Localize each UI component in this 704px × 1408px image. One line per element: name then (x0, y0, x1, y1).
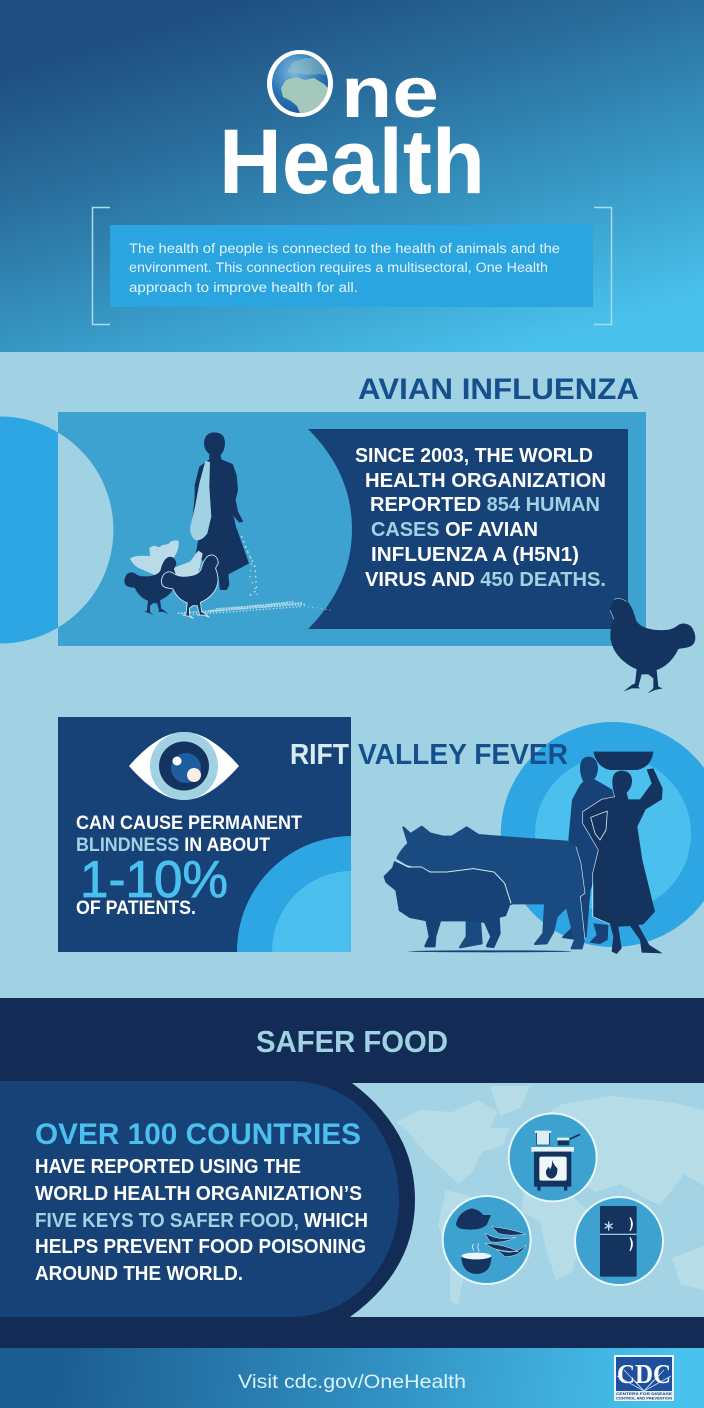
title: ne (341, 53, 439, 133)
blindness statistic text: OF PATIENTS. (76, 898, 196, 919)
pot (461, 1257, 491, 1274)
light section background (0, 352, 704, 998)
avian influenza statistics text: CASES OF AVIAN (371, 519, 538, 541)
avian influenza statistics text: VIRUS AND 450 DEATHS. (365, 569, 606, 591)
sheep outline (397, 861, 511, 903)
man second leg (589, 923, 608, 944)
icon: eye (129, 732, 239, 800)
intro text box: approach to improve health for all. (129, 280, 358, 295)
hen right (161, 555, 218, 618)
avian influenza statistics text: REPORTED 854 HUMAN (370, 494, 600, 516)
illustration: people and livestock (385, 752, 663, 954)
cow outline (576, 847, 585, 940)
pale circle inside panel (58, 432, 113, 628)
circle behind panel (0, 416, 114, 644)
blindness statistic text: 1-10% (80, 851, 228, 909)
safer food text: WORLD HEALTH ORGANIZATION’S (35, 1183, 362, 1205)
CDC logo (614, 1355, 674, 1401)
world map panel (0, 1081, 704, 1317)
intro text box: The health of people is connected to the health of animals and the (129, 241, 560, 256)
footer link text: Visit cdc.gov/OneHealth (238, 1372, 466, 1393)
arm outline (591, 811, 607, 840)
illustration: woman feeding chickens (130, 432, 330, 615)
circles behind people (501, 722, 704, 947)
title (224, 50, 480, 194)
left bracket (92, 208, 110, 324)
outer dark crescent (340, 1083, 415, 1317)
sash (190, 461, 211, 540)
panel background (58, 412, 646, 646)
CDC logo: CENTERS FOR DISEASE (616, 1392, 673, 1396)
poultry (456, 1208, 491, 1230)
hen left (124, 557, 176, 615)
safer food text: HAVE REPORTED USING THE (35, 1156, 301, 1178)
blindness statistic text: CAN CAUSE PERMANENT (76, 813, 302, 834)
safer food text: FIVE KEYS TO SAFER FOOD, WHICH (35, 1210, 368, 1232)
footer bar (0, 1348, 704, 1408)
intro text box: environment. This connection requires a multisectoral, One Health (129, 260, 548, 275)
pale hens (130, 540, 203, 577)
icon: stove (509, 1113, 597, 1201)
heading: rift valley fever: RIFT (290, 739, 349, 771)
panel: avian influenza (0, 412, 646, 646)
shadow (408, 950, 572, 952)
heading: rift valley fever: VALLEY FEVER (358, 739, 568, 771)
safer food text: AROUND THE WORLD. (35, 1263, 243, 1285)
blindness statistic text: BLINDNESS IN ABOUT (76, 835, 270, 856)
safer food text: HELPS PREVENT FOOD POISONING (35, 1236, 366, 1258)
icon: food (443, 1196, 531, 1284)
CDC logo: CDC (617, 1359, 671, 1389)
man (563, 757, 613, 939)
quarter circles (237, 836, 351, 952)
avian influenza statistics text (355, 445, 606, 591)
grain (178, 537, 330, 615)
map continents (396, 1086, 704, 1306)
icon: globe as letter O (267, 50, 333, 118)
panel: safer food background (0, 998, 704, 1348)
panel: rift valley fever blindness (58, 717, 351, 952)
avian influenza statistics text: SINCE 2003, THE WORLD (355, 445, 593, 467)
blindness statistic text (76, 813, 302, 919)
pots (535, 1131, 580, 1145)
title: Health (219, 111, 485, 213)
cow (397, 827, 584, 948)
CDC logo: CONTROL AND PREVENTION (616, 1396, 673, 1400)
heading: safer food: SAFER FOOD (256, 1024, 448, 1059)
header background (0, 0, 704, 352)
avian influenza statistics text: HEALTH ORGANIZATION (365, 470, 606, 492)
woman (193, 432, 249, 590)
snowflake (605, 1221, 613, 1231)
right bracket (594, 208, 612, 324)
dark text block (308, 429, 628, 629)
steam (472, 1243, 479, 1252)
woman outline (583, 797, 615, 924)
blue text panel (0, 1081, 399, 1317)
safer food text (35, 1118, 368, 1285)
avian influenza statistics text: INFLUENZA A (H5N1) (371, 544, 579, 566)
woman with basin (583, 768, 663, 954)
icon: refrigerator (575, 1197, 663, 1285)
intro text box (110, 225, 593, 307)
sheep (385, 863, 509, 947)
heading: avian influenza: AVIAN INFLUENZA (358, 373, 639, 406)
safer food text: OVER 100 COUNTRIES (35, 1118, 361, 1151)
fish (485, 1227, 526, 1257)
basin (593, 752, 653, 770)
illustration: large hen (610, 598, 695, 693)
